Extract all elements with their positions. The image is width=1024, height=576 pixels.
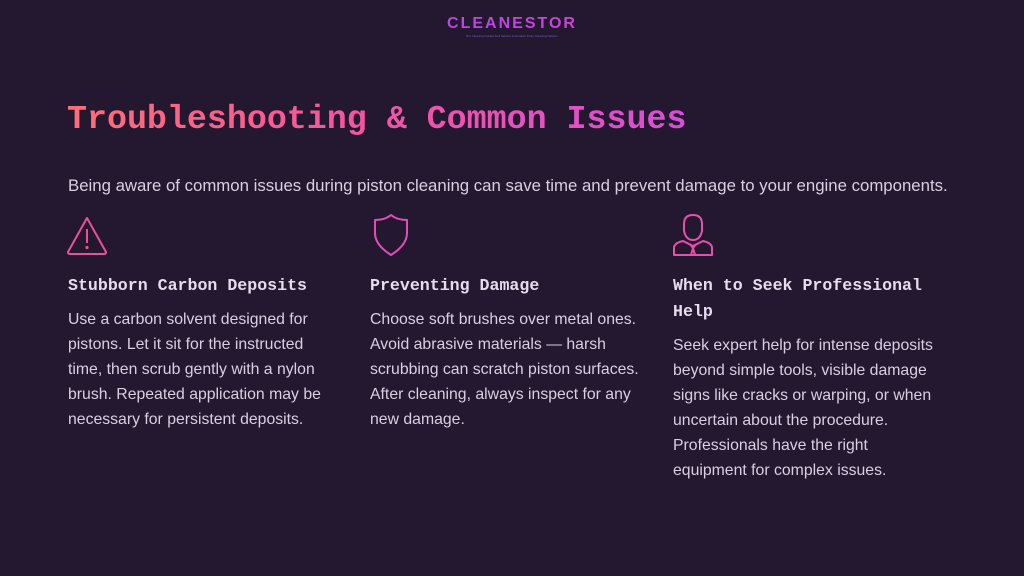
body text xyxy=(673,337,933,479)
heading xyxy=(673,276,922,321)
subtitle: Being aware of common issues during piston cleaning can save time and prevent damage to your engine components. xyxy=(68,176,948,195)
body text: brush. Repeated application may be xyxy=(68,386,321,403)
body text: scrubbing can scratch piston surfaces. xyxy=(370,361,639,378)
panel: professional help xyxy=(673,214,933,479)
logo: CLEANESTOR xyxy=(447,15,577,32)
panel: preventing damage xyxy=(370,214,639,428)
body text: Choose soft brushes over metal ones. xyxy=(370,311,636,328)
body text: beyond simple tools, visible damage xyxy=(673,362,927,379)
icon: person xyxy=(673,214,713,256)
body text: necessary for persistent deposits. xyxy=(68,411,303,428)
heading: Help xyxy=(673,302,713,321)
body text: new damage. xyxy=(370,411,465,428)
icon: shield xyxy=(374,214,408,256)
logo: Pro Cleaning Guides And Service Journalism From Cleaning Nations xyxy=(466,34,558,38)
body text xyxy=(68,311,321,428)
body text: pistons. Let it sit for the instructed xyxy=(68,336,303,353)
body text: Use a carbon solvent designed for xyxy=(68,311,308,328)
heading: Stubborn Carbon Deposits xyxy=(68,276,307,295)
body text: signs like cracks or warping, or when xyxy=(673,387,931,404)
body text: Avoid abrasive materials — harsh xyxy=(370,336,606,353)
heading: Preventing Damage xyxy=(370,276,539,295)
body text xyxy=(370,311,639,428)
heading: When to Seek Professional xyxy=(673,276,922,295)
icon: warning xyxy=(67,217,107,255)
body text: equipment for complex issues. xyxy=(673,462,886,479)
panel: carbon deposits xyxy=(67,217,321,428)
body text: uncertain about the procedure. xyxy=(673,412,888,429)
title: Troubleshooting & Common Issues xyxy=(67,100,686,138)
body text: After cleaning, always inspect for any xyxy=(370,386,631,403)
body text: Professionals have the right xyxy=(673,437,868,454)
body text: time, then scrub gently with a nylon xyxy=(68,361,315,378)
body text: Seek expert help for intense deposits xyxy=(673,337,933,354)
